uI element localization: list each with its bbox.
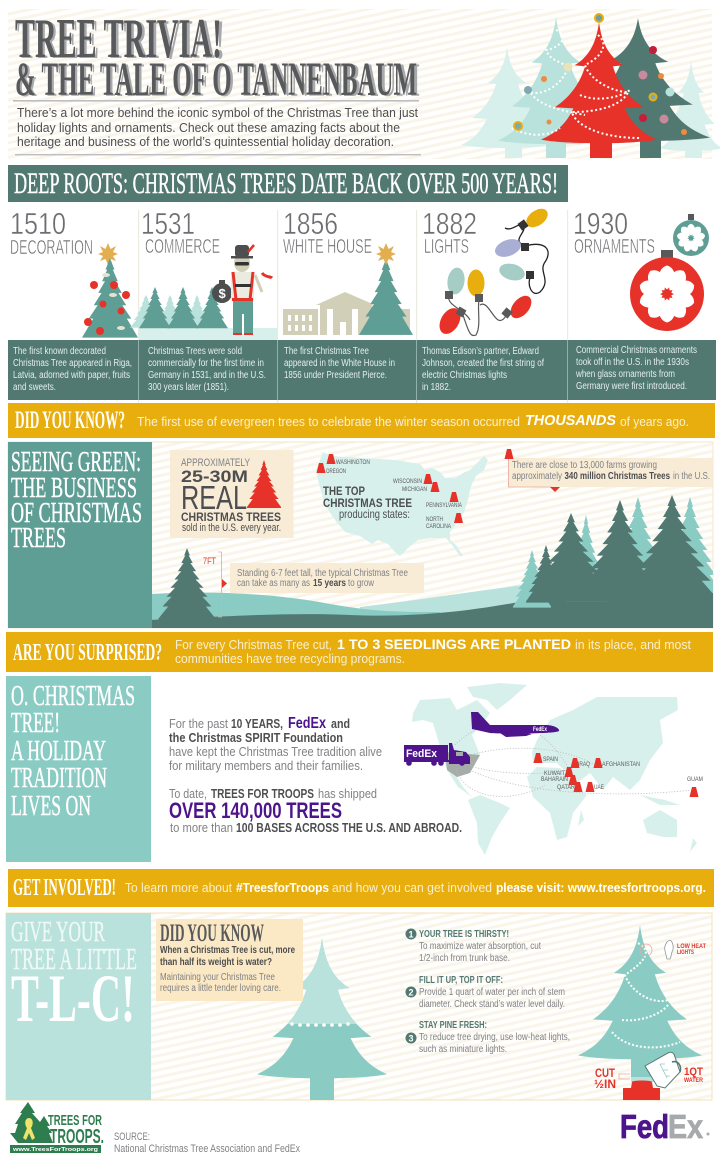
trees for troops text: FedEx: [288, 715, 326, 732]
timeline descriptions: Germany were first introduced.: [576, 381, 687, 392]
timeline descriptions: Germany in 1531, and in the U.S.: [148, 370, 266, 381]
timeline descriptions: Christmas Trees were sold: [148, 346, 242, 357]
tip 1: YOUR TREE IS THIRSTY!: [419, 929, 509, 940]
callout: typical tree: [158, 548, 424, 620]
intro text: heritage and business of the world’s quintessential holiday decoration.: [17, 134, 394, 149]
callout: typical tree: to grow: [348, 578, 375, 589]
panel: tree care tlc: [6, 913, 712, 1100]
timeline 1930 ornaments: ORNAMENTS: [574, 236, 655, 258]
logo: trees for troops: [10, 1102, 104, 1153]
callout: 25-30m real trees: [170, 450, 294, 538]
timeline 1930 ornaments: [573, 206, 709, 331]
timeline descriptions: Latvia, adorned with paper, fruits: [13, 370, 130, 381]
timeline 1930 ornaments: 1930: [573, 206, 628, 241]
banner: get involved: #TreesforTroops: [236, 880, 329, 895]
logo: fedex: Ex: [668, 1108, 704, 1145]
tip 1: 1: [408, 930, 414, 940]
trees for troops text: the Christmas SPIRIT Foundation: [169, 730, 343, 745]
military base markers: BAHARAIN: [541, 776, 568, 783]
timeline 1856 white house: WHITE HOUSE: [283, 236, 372, 258]
tip 1: To maximize water absorption, cut: [419, 941, 541, 952]
panel: o christmas tree: [6, 676, 703, 862]
tip 3: such as miniature lights.: [419, 1044, 507, 1055]
tip 3: To reduce tree drying, use low-heat lights,: [419, 1032, 570, 1043]
timeline descriptions: [8, 340, 716, 400]
trees for troops text: [169, 715, 462, 835]
tip 3: STAY PINE FRESH:: [419, 1020, 487, 1031]
section panel heading: O. CHRISTMAS: [11, 680, 135, 712]
military base markers: QATAR: [557, 784, 575, 791]
section panel heading: TREE!: [11, 707, 60, 739]
trees for troops text: to more than: [170, 820, 233, 835]
illustration: tree care diagram: LOW HEAT: [677, 944, 706, 950]
map: top producing states: WISCONSIN: [393, 478, 422, 485]
timeline 1882 lights: 1882: [422, 206, 477, 241]
title: tree trivia: [15, 8, 225, 71]
banner: get involved: and how you can get involved: [332, 880, 492, 895]
banner: did you know: THOUSANDS: [525, 413, 616, 429]
icon: large tree: [257, 938, 387, 1100]
timeline descriptions: when glass ornaments from: [575, 369, 675, 380]
tip 2: Provide 1 quart of water per inch of stem: [419, 987, 565, 998]
header panel: [8, 8, 720, 159]
trees for troops text: and: [331, 716, 350, 731]
callout: 13,000 farms: approximately: [512, 471, 562, 482]
military base markers: GUAM: [687, 776, 703, 783]
callout: typical tree: 15 years: [313, 578, 346, 589]
icon: tree seller: [130, 245, 277, 340]
callout: 13,000 farms: 340 million Christmas Trees: [564, 471, 670, 482]
tip 2: [406, 975, 565, 1010]
timeline descriptions: 1856 under President Pierce.: [284, 370, 387, 381]
subtitle: the tale of o tannenbaum: [15, 53, 420, 107]
callout: 13,000 farms: [504, 449, 713, 492]
illustration: tree care diagram: 1QT: [684, 1066, 703, 1078]
illustration: tree care diagram: ½IN: [594, 1077, 616, 1091]
trees for troops text: have kept the Christmas Tree tradition alive: [169, 744, 382, 759]
icon: fedex truck: [404, 743, 470, 766]
timeline 1510 decoration: [10, 206, 138, 338]
map: top producing states: OREGON: [326, 468, 346, 475]
source: National Christmas Tree Association and FedEx: [114, 1143, 300, 1155]
icon: fedex truck: FedEx: [406, 748, 438, 760]
timeline descriptions: took off in the U.S. in the 1930s: [576, 357, 689, 368]
timeline descriptions: appeared in the White House in: [284, 358, 395, 369]
source: [114, 1131, 300, 1155]
world map with routes: [404, 683, 703, 855]
section panel heading: [6, 676, 151, 862]
map: top producing states: [316, 452, 488, 556]
timeline: [8, 205, 716, 405]
timeline 1510 decoration: DECORATION: [10, 237, 93, 259]
military base markers: IRAQ: [578, 761, 590, 768]
banner: get involved: To learn more about: [125, 880, 232, 895]
trees for troops text: for military members and their families.: [169, 758, 363, 773]
trees for troops text: 10 YEARS,: [231, 716, 283, 731]
callout: did you know: requires a little tender loving care.: [160, 983, 281, 994]
timeline descriptions: The first known decorated: [13, 346, 106, 357]
footer: [10, 1102, 710, 1155]
tip 3: [406, 1020, 570, 1055]
map: top producing states: CHRISTMAS TREE: [323, 496, 412, 510]
callout: did you know: When a Christmas Tree is cut, more: [160, 945, 295, 956]
icon: ornaments: [630, 214, 709, 331]
map: top producing states: WASHINGTON: [336, 459, 370, 466]
section panel heading: TREES: [11, 522, 66, 554]
map: top producing states: PENNSYLVANIA: [426, 502, 462, 509]
section panel heading: OF CHRISTMAS: [11, 497, 142, 529]
banner: did you know: The first use of evergreen trees to celebrate the winter season occurred: [137, 414, 520, 429]
icon: string of lights: [435, 205, 551, 338]
section panel heading: T-L-C!: [11, 960, 135, 1036]
banner: are you surprised: For every Christmas Tree cut,: [175, 637, 332, 652]
logo: trees for troops: www.TreesForTroops.org: [12, 1147, 98, 1153]
title: tree trivia: TREE TRIVIA!: [15, 8, 222, 70]
section panel heading: THE BUSINESS: [11, 472, 137, 504]
callout: 13,000 farms: There are close to 13,000 farms growing: [512, 460, 657, 471]
banner: did you know: [8, 403, 715, 438]
section panel heading: [6, 913, 151, 1100]
illustration: tree care diagram: [578, 925, 706, 1100]
timeline descriptions: Johnson, created the first string of: [422, 358, 544, 369]
section panel heading: GIVE YOUR: [11, 916, 105, 948]
timeline descriptions: Christmas Tree appeared in Riga,: [13, 358, 132, 369]
banner: are you surprised: in its place, and most: [575, 637, 691, 652]
trees for troops text: TREES FOR TROOPS: [211, 786, 314, 801]
callout: typical tree: 7FT: [203, 556, 216, 566]
timeline descriptions: The first Christmas Tree: [284, 346, 369, 357]
section panel heading: TREE A LITTLE: [11, 941, 137, 976]
callout: 13,000 farms: in the U.S.: [673, 471, 710, 482]
timeline descriptions: electric Christmas lights: [422, 370, 507, 381]
logo: trees for troops: TROOPS.: [50, 1126, 104, 1148]
timeline 1510 decoration: 1510: [10, 206, 66, 241]
banner: did you know: DID YOU KNOW?: [15, 407, 125, 434]
tip 3: 3: [408, 1034, 414, 1044]
callout: 25-30m real trees: 25-30M: [181, 467, 248, 486]
illustration: tree care diagram: LIGHTS: [677, 950, 694, 956]
banner: are you surprised: ARE YOU SURPRISED?: [13, 640, 162, 666]
icon: fedex plane: FedEx: [533, 727, 548, 733]
logo: fedex: [620, 1108, 710, 1145]
banner: get involved: please visit: www.treesfortroops.org.: [496, 880, 706, 895]
callout: typical tree: Standing 6-7 feet tall, the typical Christmas Tree: [237, 568, 408, 579]
icon: tree seller: $: [218, 286, 226, 301]
icon: decorated tree: [82, 243, 138, 338]
banner: get involved: [8, 869, 714, 907]
illustration: tree care diagram: CUT: [595, 1066, 616, 1080]
map: top producing states: producing states:: [339, 507, 410, 521]
timeline descriptions: and sweets.: [13, 382, 56, 393]
trees for troops text: To date,: [169, 786, 207, 801]
illustration: christmas trees: [461, 13, 720, 158]
section panel heading: A HOLIDAY: [11, 735, 106, 767]
tip 1: 1/2-inch from trunk base.: [419, 953, 510, 964]
timeline 1882 lights: LIGHTS: [424, 236, 469, 258]
map: top producing states: THE TOP: [323, 484, 365, 498]
military base markers: SPAIN: [543, 756, 558, 763]
banner: get involved: GET INVOLVED!: [13, 875, 116, 901]
military base markers: KUWAIT: [544, 770, 565, 777]
banner: are you surprised: 1 TO 3 SEEDLINGS ARE PLANTED: [337, 636, 571, 652]
timeline 1856 white house: 1856: [283, 206, 338, 241]
intro text: There’s a lot more behind the iconic symbol of the Christmas Tree than just: [17, 105, 418, 120]
banner: did you know: of years ago.: [620, 414, 689, 429]
timeline 1531 commerce: [130, 206, 277, 340]
panel: seeing green: [8, 442, 720, 628]
trees for troops text: has shipped: [318, 786, 377, 801]
military base markers: UAE: [594, 784, 604, 791]
map: top producing states: NORTH: [426, 516, 443, 523]
icon: fedex plane: [471, 712, 559, 737]
map: top producing states: CAROLINA: [426, 523, 451, 530]
callout: did you know: [156, 919, 303, 1001]
forest of pine trees: [513, 495, 720, 608]
timeline descriptions: 300 years later (1851).: [148, 382, 229, 393]
intro text: holiday lights and ornaments. Check out these amazing facts about the: [17, 120, 400, 135]
tip 1: [406, 928, 541, 964]
callout: did you know: Maintaining your Christmas Tree: [160, 972, 275, 983]
source: SOURCE:: [114, 1131, 150, 1143]
tip 2: FILL IT UP, TOP IT OFF:: [419, 975, 503, 986]
icon: white house with tree: [283, 243, 413, 335]
map: top producing states: MICHIGAN: [402, 486, 427, 493]
banner: are you surprised: communities have tree recycling programs.: [175, 651, 405, 666]
section panel heading: SEEING GREEN:: [11, 446, 141, 478]
trees for troops text: OVER 140,000 TREES: [169, 798, 342, 823]
callout: 25-30m real trees: sold in the U.S. every year.: [182, 522, 281, 534]
trees for troops text: 100 BASES ACROSS THE U.S. AND ABROAD.: [236, 820, 462, 835]
title: tree trivia: TREE TRIVIA!: [17, 9, 225, 71]
section panel heading: [8, 442, 152, 628]
callout: typical tree: can take as many as: [237, 578, 310, 589]
timeline 1531 commerce: COMMERCE: [145, 236, 220, 258]
icon: red tree: [247, 460, 281, 508]
timeline descriptions: Thomas Edison’s partner, Edward: [422, 346, 539, 357]
timeline descriptions: in 1882.: [422, 382, 451, 393]
tip 2: 2: [408, 988, 414, 998]
callout: 25-30m real trees: CHRISTMAS TREES: [181, 510, 281, 524]
banner: are you surprised: [6, 632, 713, 672]
timeline descriptions: commercially for the first time in: [148, 358, 264, 369]
logo: trees for troops: TREES FOR: [48, 1112, 102, 1129]
trees for troops text: For the past: [169, 716, 228, 731]
callout: 25-30m real trees: REAL: [181, 479, 247, 516]
timeline 1856 white house: [283, 206, 413, 335]
callout: did you know: DID YOU KNOW: [160, 920, 264, 947]
timeline 1531 commerce: 1531: [141, 206, 195, 241]
military base markers: [534, 753, 703, 797]
callout: did you know: than half its weight is water?: [160, 957, 272, 968]
illustration: tree care diagram: WATER: [684, 1078, 704, 1084]
intro text: [17, 105, 418, 149]
hills and ground: [150, 583, 713, 628]
timeline 1882 lights: [422, 205, 551, 338]
military base markers: AFGHANISTAN: [602, 761, 640, 768]
callout: 25-30m real trees: APPROXIMATELY: [181, 457, 250, 469]
tip 2: diameter. Check stand’s water level daily.: [419, 999, 565, 1010]
section panel heading: TRADITION: [11, 762, 107, 794]
section panel heading: LIVES ON: [11, 790, 91, 822]
logo: fedex: Fed: [620, 1108, 669, 1145]
